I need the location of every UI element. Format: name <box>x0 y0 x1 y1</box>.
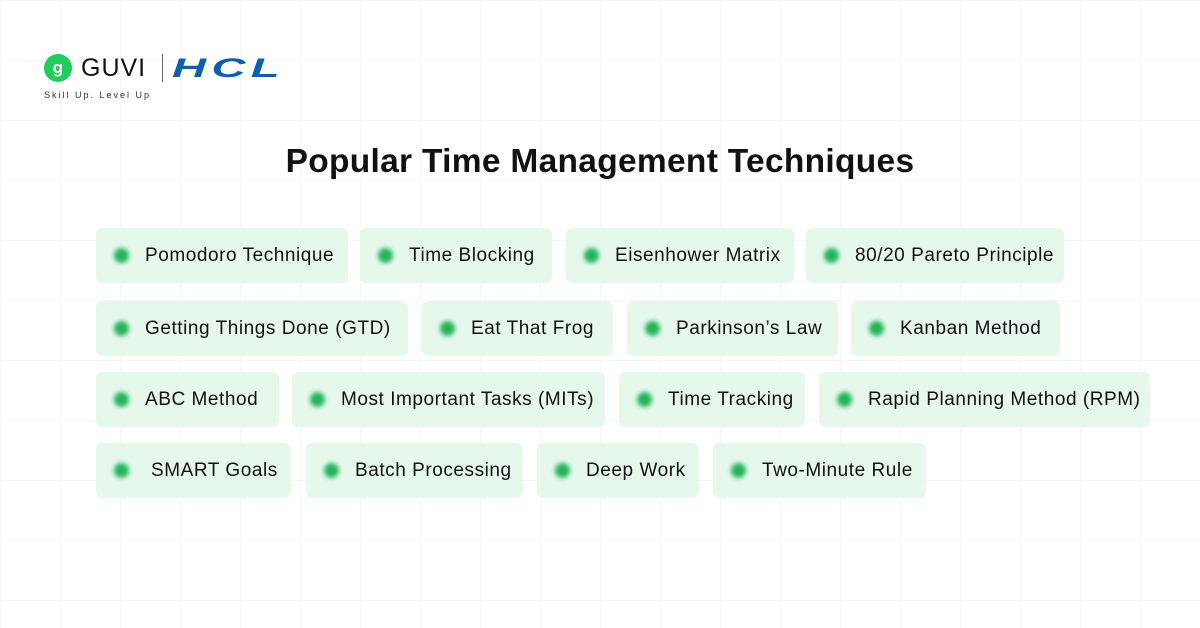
pill: Pareto: 80/20 Pareto Principle <box>855 245 1054 266</box>
pill: Time Blocking <box>360 228 552 283</box>
pill: Deep Work <box>537 443 699 498</box>
pill: MITs <box>292 372 605 427</box>
pill: Pomodoro: Pomodoro Technique <box>145 245 334 266</box>
divider + HCL <box>162 54 163 82</box>
pill: Batch: Batch Processing <box>355 460 512 481</box>
pill: Eat That Frog: Eat That Frog <box>471 318 594 339</box>
pill: Eat That Frog <box>422 301 613 356</box>
pill: GTD: Getting Things Done (GTD) <box>145 318 391 339</box>
text: HCL: HCL <box>172 53 285 83</box>
pill: Eisenhower <box>566 228 794 283</box>
tagline: Skill Up. Level Up <box>44 90 151 100</box>
pill: Kanban: Kanban Method <box>900 318 1041 339</box>
pill: Parkinson: Parkinson’s Law <box>676 318 822 339</box>
pill: Two-Minute: Two-Minute Rule <box>762 460 913 481</box>
pill: RPM: Rapid Planning Method (RPM) <box>868 389 1141 410</box>
title: Popular Time Management Techniques <box>286 143 914 180</box>
logo <box>44 53 285 100</box>
pill: Time Blocking: Time Blocking <box>409 245 535 266</box>
pill: Pareto <box>806 228 1064 283</box>
pill: Two-Minute <box>713 443 926 498</box>
pills <box>96 228 1150 498</box>
pill: Parkinson <box>627 301 838 356</box>
pill: Kanban <box>851 301 1060 356</box>
text: GUVI: GUVI <box>81 54 146 82</box>
pill: Time Tracking: Time Tracking <box>668 389 794 410</box>
pill: Deep Work: Deep Work <box>586 460 686 481</box>
pill: Eisenhower: Eisenhower Matrix <box>615 245 781 266</box>
pill: GTD <box>96 301 408 356</box>
pill: Pomodoro <box>96 228 348 283</box>
pill: RPM <box>819 372 1150 427</box>
pill: Time Tracking <box>619 372 805 427</box>
pill: ABC <box>96 372 279 427</box>
pill: SMART <box>96 443 291 498</box>
icon: guvi circle <box>44 54 72 82</box>
pill: Batch <box>306 443 523 498</box>
icon: guvi circle: g <box>53 58 63 77</box>
pill: SMART: SMART Goals <box>151 460 278 481</box>
pill: MITs: Most Important Tasks (MITs) <box>341 389 594 410</box>
pill: ABC: ABC Method <box>145 389 258 410</box>
